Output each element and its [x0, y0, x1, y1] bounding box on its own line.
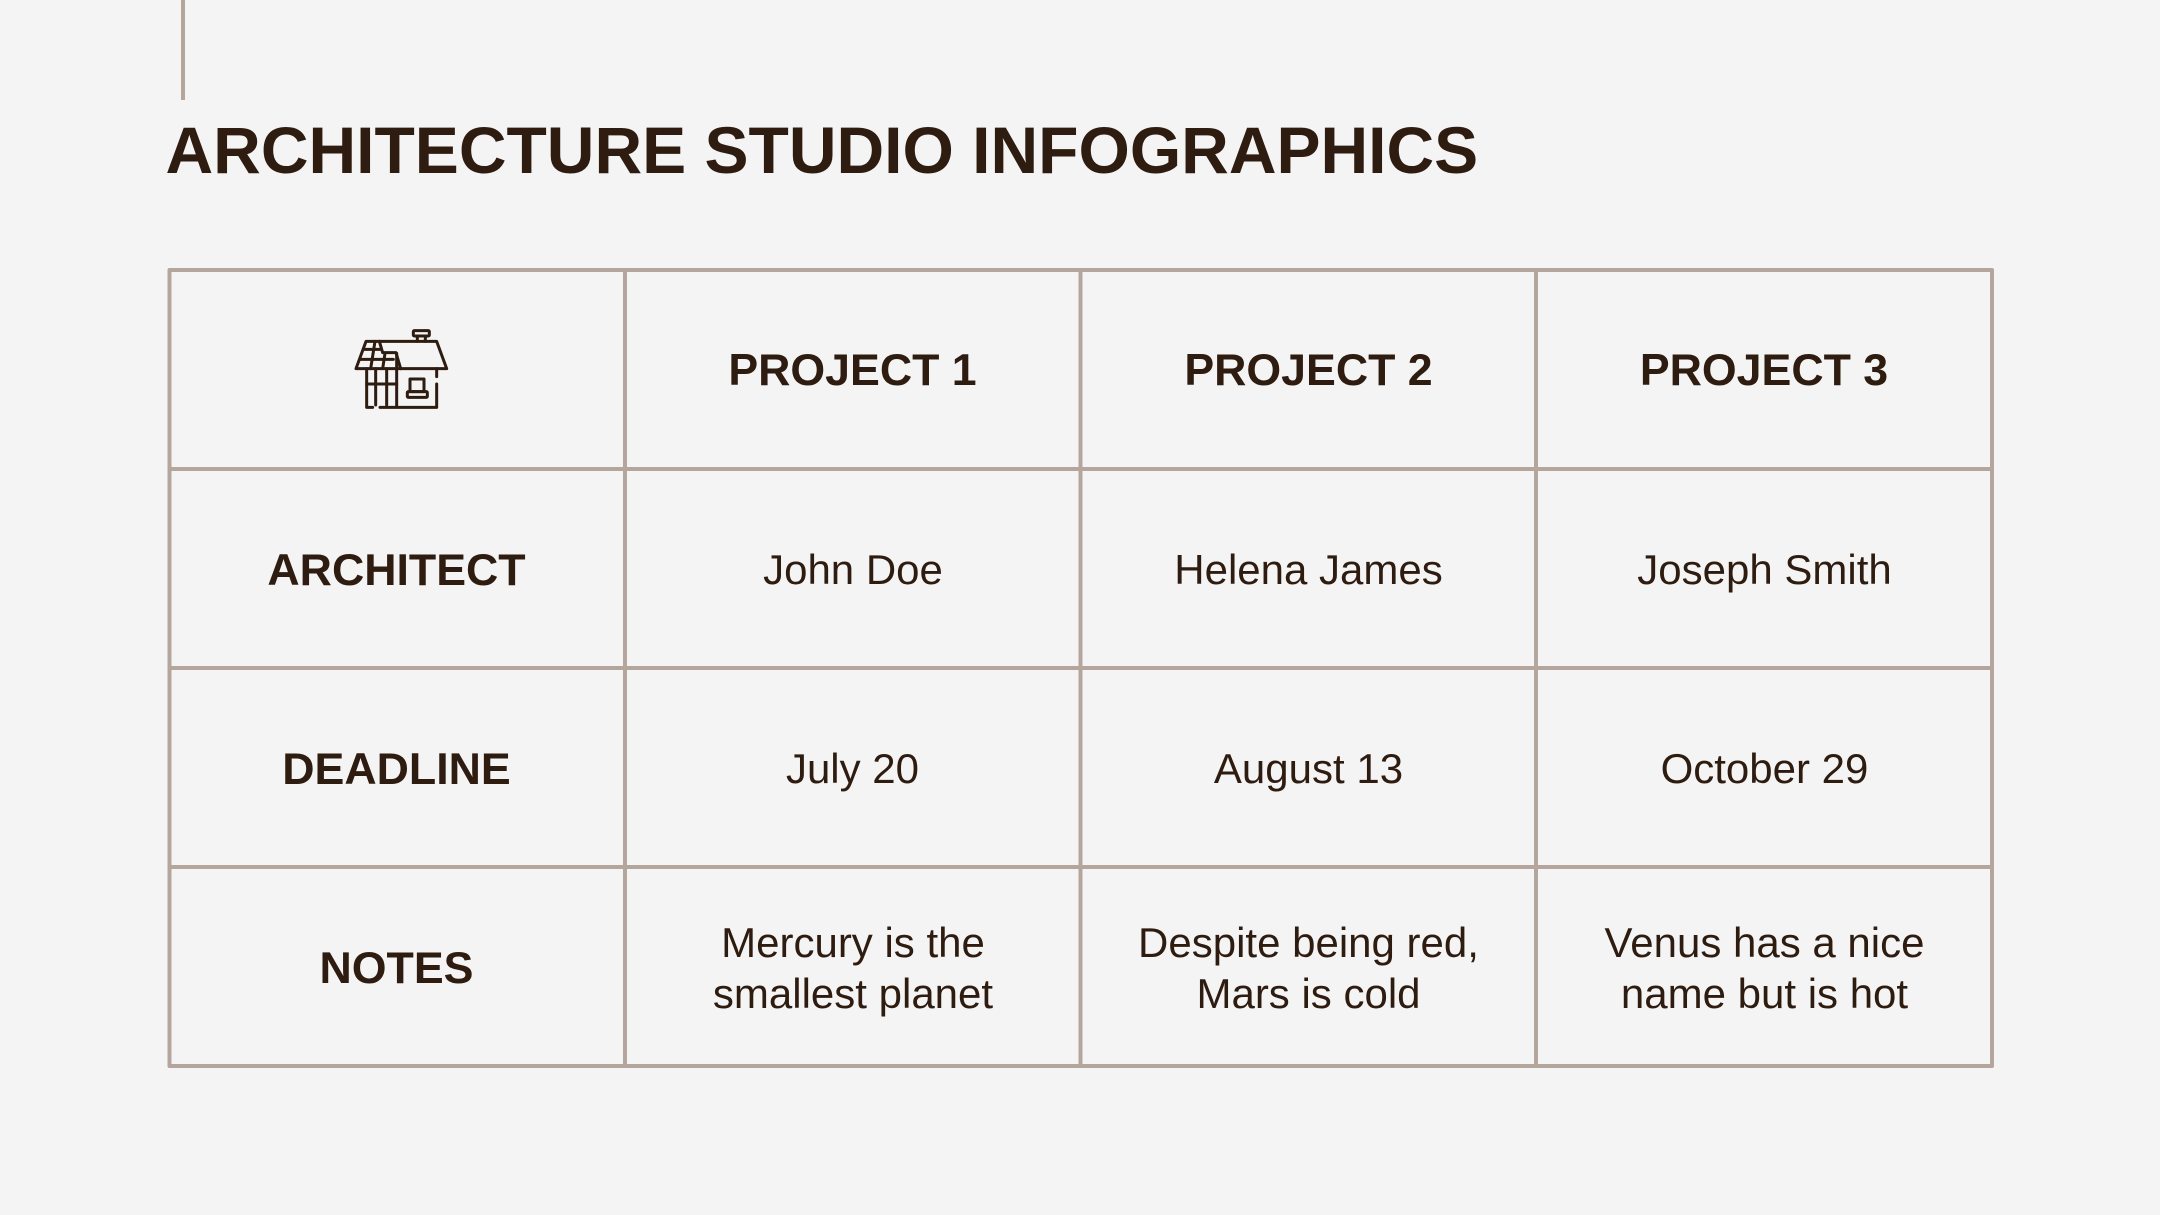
architect: project 1: John Doe — [763, 546, 943, 593]
notes: project 2 — [1138, 919, 1479, 1017]
notes: project 3 — [1604, 919, 1924, 1017]
row heading: notes: NOTES — [320, 944, 473, 993]
notes: project 1: smallest planet — [713, 970, 993, 1017]
icon: house — [354, 329, 448, 409]
column heading: project 3: PROJECT 3 — [1640, 346, 1888, 395]
accent line — [181, 0, 185, 100]
row heading: deadline: DEADLINE — [282, 745, 511, 794]
architect: project 2: Helena James — [1174, 546, 1443, 593]
title: ARCHITECTURE STUDIO INFOGRAPHICS — [166, 113, 1478, 187]
notes: project 1 — [713, 919, 993, 1017]
notes: project 3: Venus has a nice — [1605, 919, 1924, 966]
column heading: project 1: PROJECT 1 — [728, 346, 977, 395]
notes: project 2: Despite being red, — [1138, 919, 1479, 966]
row heading: architect: ARCHITECT — [267, 546, 526, 595]
notes: project 2: Mars is cold — [1196, 970, 1421, 1017]
deadline: project 3: October 29 — [1661, 745, 1868, 792]
deadline: project 2: August 13 — [1214, 745, 1403, 792]
architect: project 3: Joseph Smith — [1637, 546, 1892, 593]
column heading: project 2: PROJECT 2 — [1184, 346, 1433, 395]
notes: project 1: Mercury is the — [721, 919, 985, 966]
notes: project 3: name but is hot — [1621, 970, 1908, 1017]
deadline: project 1: July 20 — [786, 745, 919, 792]
